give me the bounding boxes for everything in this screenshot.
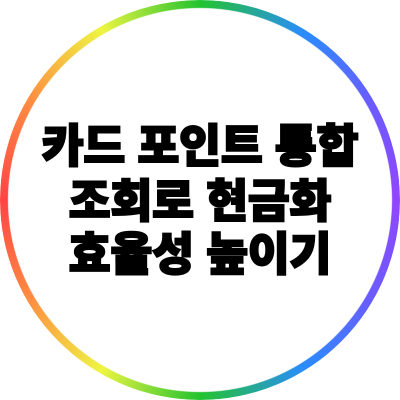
title: 카드 포인트 통합	[42, 121, 358, 172]
title: 효율성 높이기	[69, 229, 331, 280]
title: 조회로 현금화	[69, 176, 331, 227]
